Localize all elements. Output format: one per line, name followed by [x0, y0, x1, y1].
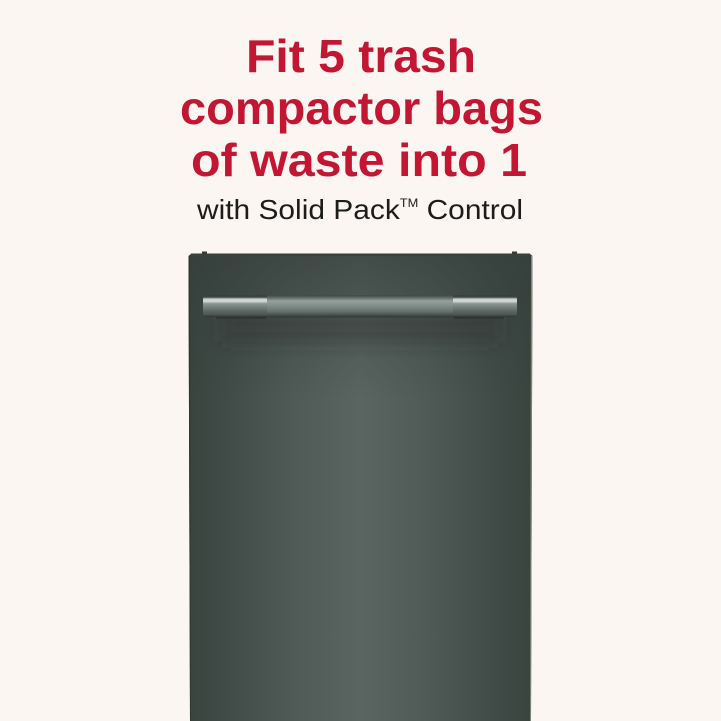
- title: of waste into 1: [191, 134, 527, 186]
- door top pegs: [202, 252, 517, 254]
- subtitle: Control: [418, 194, 523, 225]
- title: [180, 30, 543, 186]
- door body: [188, 254, 532, 721]
- door handle: [203, 295, 517, 319]
- subtitle: TM: [400, 196, 418, 210]
- title: Fit 5 trash: [246, 30, 476, 82]
- subtitle: with Solid Pack: [197, 194, 387, 225]
- appliance door panel: [188, 252, 532, 721]
- left handle cap: [203, 296, 267, 317]
- title: compactor bags: [180, 82, 543, 134]
- right handle cap: [453, 296, 517, 317]
- handle shadow: [222, 316, 498, 342]
- handle cap contact shadows: [216, 316, 266, 319]
